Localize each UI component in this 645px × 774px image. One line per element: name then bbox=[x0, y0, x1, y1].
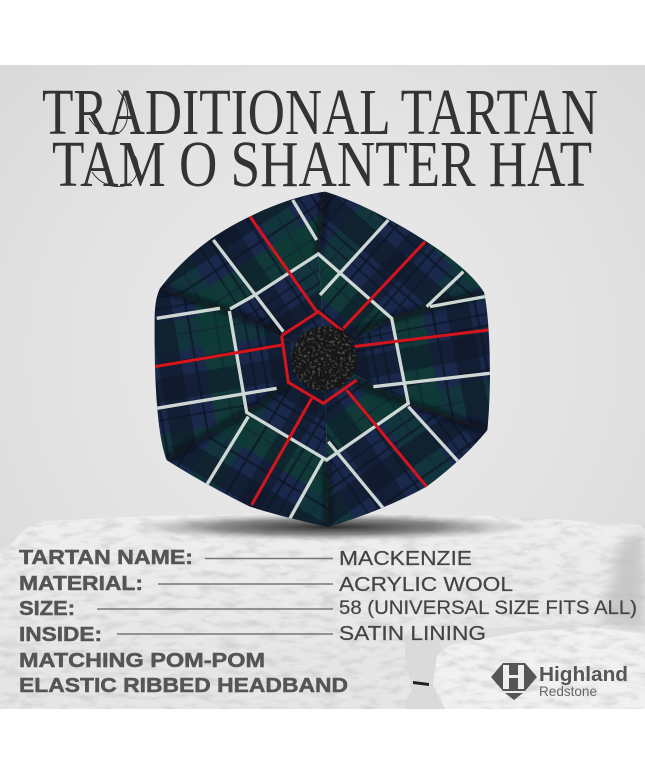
spec values: 58 (UNIVERSAL SIZE FITS ALL) bbox=[339, 598, 637, 619]
spec values: SATIN LINING bbox=[339, 623, 486, 645]
specifications bbox=[19, 547, 637, 697]
spec labels: SIZE: bbox=[19, 598, 75, 620]
tartan hat bbox=[154, 192, 490, 527]
spec labels: MATERIAL: bbox=[19, 573, 143, 595]
spec values: ACRYLIC WOOL bbox=[339, 574, 513, 596]
logo: Highland Redstone bbox=[491, 663, 628, 700]
icon: pom-pom bbox=[292, 326, 357, 391]
hat fabric panels bbox=[154, 192, 490, 527]
logo subtitle: Redstone bbox=[539, 683, 597, 699]
rock: lower centre boulder bbox=[0, 640, 412, 709]
hat drop shadow bbox=[125, 513, 535, 541]
logo wordmark: Highland bbox=[539, 664, 628, 686]
rock: right face bbox=[600, 530, 645, 630]
spec labels: ELASTIC RIBBED HEADBAND bbox=[19, 675, 348, 697]
rock: lower right block bbox=[433, 627, 645, 709]
spec labels: MATCHING POM-POM bbox=[19, 650, 265, 672]
spec values: MACKENZIE bbox=[339, 548, 472, 570]
title bbox=[42, 76, 598, 201]
red tartan lines bbox=[155, 217, 488, 505]
rock: upper slab bbox=[0, 513, 645, 709]
rock: gap between blocks bbox=[405, 636, 445, 709]
spec labels: TARTAN NAME: bbox=[19, 547, 193, 569]
leader lines bbox=[97, 558, 333, 634]
spec labels: INSIDE: bbox=[19, 624, 102, 646]
icon: diamond logo mark bbox=[491, 663, 537, 700]
dark gap mark bbox=[413, 681, 429, 686]
spec labels bbox=[19, 547, 348, 697]
spec values bbox=[339, 548, 637, 645]
white tartan lines bbox=[157, 200, 490, 518]
